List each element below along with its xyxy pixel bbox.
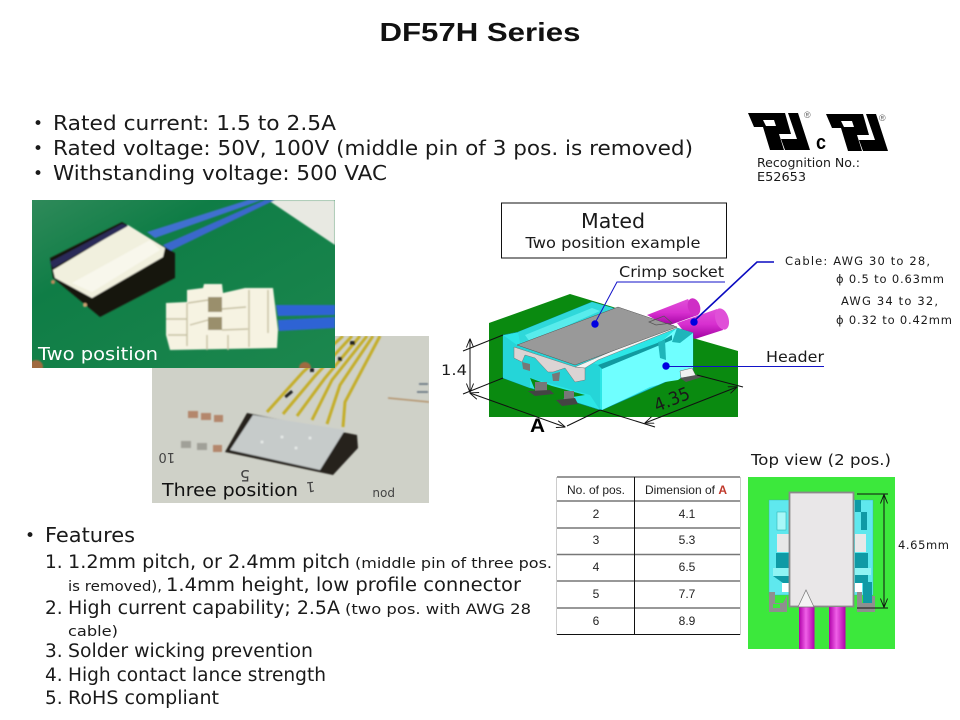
photo: three position connector: 1 [305,478,316,494]
features list: 1.2mm pitch, or 2.4mm pitch [68,552,350,573]
features list: (two pos. with AWG 28 [345,602,531,618]
callout: cable: ϕ 0.32 to 0.42mm [836,313,952,327]
ratings bullet list [33,111,693,185]
callout: cable [690,254,952,327]
features list: 1.4mm height, low profile connector [166,575,521,596]
label: two position: Two position [37,344,158,365]
callout: crimp socket: Crimp socket [619,263,724,281]
callout: cable: Cable: AWG 30 to 28, [785,254,930,268]
recognition number [757,156,860,184]
callout: header: Header [766,348,825,366]
dimension table: 6.5 [679,560,696,574]
dimension table: 4 [593,560,600,574]
dimension value: 4.65mm: 4.65mm [898,538,949,552]
recognition number: Recognition No.: [757,156,860,170]
label box: mated: Mated [581,209,645,233]
dimension value: 4.35: 4.35 [651,383,693,417]
photo: two position connector [29,200,335,374]
dimension table: 2 [593,507,600,521]
diagram: top view of connector [748,477,895,649]
front lip [514,347,585,382]
callout: header [662,348,825,370]
dimension table: 4.1 [679,507,696,521]
ratings bullet list: Withstanding voltage: 500 VAC [53,161,387,185]
dimension value: 1.4: 1.4 [441,363,467,379]
top view heading: Top view (2 pos.) [750,451,891,469]
dimension label: A: A [530,416,545,437]
callout: cable: ϕ 0.5 to 0.63mm [836,272,944,286]
photo: three position connector [152,336,429,503]
features list: High contact lance strength [68,665,326,686]
features list: High current capability; 2.5A [68,598,340,619]
dimension table: 5.3 [679,533,696,547]
ratings bullet list: Rated voltage: 50V, 100V (middle pin of 3 pos. is removed) [53,136,693,160]
title: DF57H Series [380,17,580,47]
features list: Features [45,523,135,547]
features list: (middle pin of three pos. [355,556,552,572]
ratings bullet list: • [33,114,43,134]
dimension table: No. of pos. [567,483,625,497]
callout: crimp socket [591,263,725,328]
label box: mated: Two position example [524,234,700,252]
left housing [769,500,789,612]
features list: 3. [45,641,63,662]
callout: cable: AWG 34 to 32, [841,294,938,308]
features list: 2. [45,598,63,619]
features list: 1. [45,552,63,573]
dimension table: 7.7 [679,587,696,601]
label: three position: Three position [161,480,298,501]
pins [522,362,702,406]
dimension table: 6 [593,614,600,628]
cables [647,297,732,339]
dimension table: Dimension of A [645,483,727,497]
features list: cable) [68,624,118,640]
dimension lines [463,335,743,427]
icon: UL recognition logo [748,110,888,154]
icon: UL recognition logo: c [816,132,826,154]
ratings bullet list: Rated current: 1.5 to 2.5A [53,111,336,135]
dimension table: 8.9 [679,614,696,628]
features list: Solder wicking prevention [68,641,313,662]
features list: RoHS compliant [68,688,219,709]
features list: 5. [45,688,63,709]
dimension table: 3 [593,533,600,547]
ratings bullet list: • [33,139,43,159]
features list [25,523,552,709]
photo: three position connector: pou [372,487,395,501]
diagram: mated connector 3D view [489,294,738,417]
features list: is removed), [68,579,162,595]
features list: 4. [45,665,63,686]
icon: UL recognition logo: ® [879,113,886,123]
label box: mated [502,203,726,258]
right housing [854,500,875,612]
features list: • [25,526,35,546]
dimension table: 5 [593,587,600,601]
icon: UL recognition logo: ® [804,110,811,120]
dimension table [556,477,740,635]
photo: three position connector: 10 [158,449,175,464]
photo: three position connector: 5 [240,466,250,485]
ratings bullet list: • [33,164,43,184]
recognition number: E52653 [757,170,806,184]
